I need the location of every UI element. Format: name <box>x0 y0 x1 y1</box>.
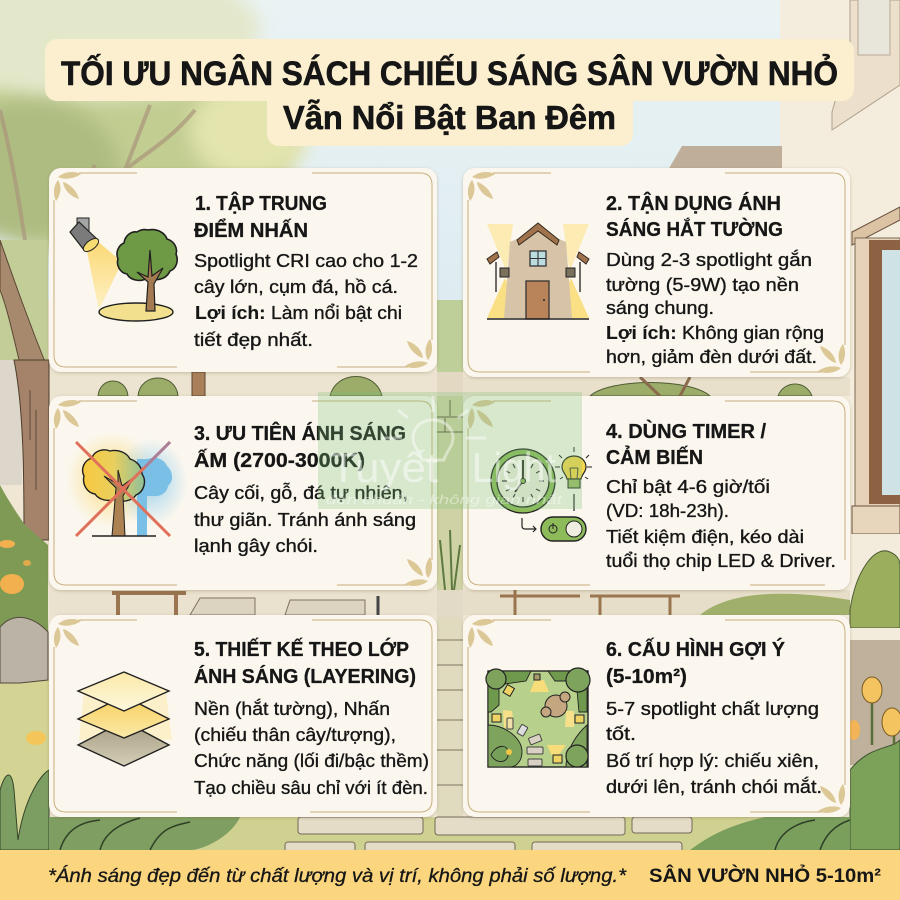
heading 6: (5-10m²) <box>606 665 687 688</box>
heading 5: ÁNH SÁNG (LAYERING) <box>194 665 416 688</box>
text 1: Spotlight CRI cao cho 1-2 <box>194 251 418 271</box>
panel 6: suggested configuration <box>463 615 850 817</box>
text 4: (VD: 18h-23h). <box>606 501 729 521</box>
panel 3: warm light <box>49 396 437 590</box>
icon: spotlight on tree <box>70 218 177 321</box>
heading 4 <box>606 419 766 469</box>
text 5: (chiếu thân cây/tượng), <box>194 725 396 745</box>
text 5 <box>194 698 429 798</box>
branch lines in foliage <box>0 105 195 290</box>
heading 4: 4. DÙNG TIMER / <box>606 419 766 443</box>
panel 1: focus on accent points <box>49 168 437 372</box>
centre channel greens <box>437 300 463 817</box>
icon: stacked light layers <box>78 672 172 766</box>
left hedge with flowers and rock <box>0 485 49 850</box>
panel 2: wall wash light <box>463 168 850 377</box>
heading 3 <box>194 421 406 472</box>
heading 3: ẤM (2700-3000K) <box>194 449 365 472</box>
building wall right <box>668 0 900 640</box>
panel 5: layering <box>49 615 437 817</box>
right hedge and tulips <box>848 534 900 850</box>
text 6: Bố trí hợp lý: chiếu xiên, <box>606 751 819 771</box>
heading 1 <box>194 191 327 242</box>
strip between rows one and two <box>49 372 850 396</box>
lawn, stepping stones and bottom plants <box>49 817 850 854</box>
text 3: lạnh gây chói. <box>194 536 318 556</box>
icon: house with wall lights <box>487 223 589 319</box>
text 1 <box>194 251 418 350</box>
text 5: Tạo chiều sâu chỉ với ít đèn. <box>194 778 428 798</box>
watermark: Tuyết <box>330 444 438 491</box>
watermark: đèn chuẩn - không gian nhất <box>326 492 564 507</box>
tree foliage top-left <box>0 0 310 260</box>
footer quote: *Ánh sáng đẹp đến từ chất lượng và vị trí, không phải số lượng.* <box>48 866 627 887</box>
title banner <box>45 39 854 146</box>
watermark: Light <box>472 444 556 491</box>
footer label: SÂN VƯỜN NHỎ 5-10m² <box>649 865 881 887</box>
text 6: tốt. <box>606 724 636 744</box>
title line 2: Vẫn Nổi Bật Ban Đêm <box>283 99 616 136</box>
text 5: Chức năng (lối đi/bậc thềm) <box>194 751 429 771</box>
text 2: hơn, giảm đèn dưới đất. <box>606 347 817 367</box>
heading 2: 2. TẬN DỤNG ÁNH <box>606 191 781 215</box>
heading 1: 1. TẬP TRUNG <box>195 191 327 215</box>
strip between rows two and three <box>49 590 850 615</box>
title line 1: TỐI ƯU NGÂN SÁCH CHIẾU SÁNG SÂN VƯỜN NHỎ <box>61 54 838 93</box>
text 2 <box>606 249 824 367</box>
heading 4: CẢM BIẾN <box>606 446 703 469</box>
heading 1: ĐIỂM NHẤN <box>194 219 308 242</box>
text 2: Lợi ích: Không gian rộng <box>606 323 824 343</box>
icon: warm versus cold tree crossed <box>66 432 188 536</box>
heading 2: SÁNG HẮT TƯỜNG <box>606 217 783 241</box>
tree trunk left <box>0 240 49 540</box>
icon: clock, bulb and switch <box>491 447 592 541</box>
text 1: cây lớn, cụm đá, hồ cá. <box>194 277 398 297</box>
text 3: Cây cối, gỗ, đá tự nhiên, <box>194 482 408 503</box>
panel 4: timer and sensor <box>463 396 850 590</box>
icon: garden plan <box>486 668 590 767</box>
heading 3: 3. ƯU TIÊN ÁNH SÁNG <box>194 421 406 445</box>
heading 5: 5. THIẾT KẾ THEO LỚP <box>194 637 409 661</box>
watermark <box>318 392 582 509</box>
heading 2 <box>606 191 783 241</box>
text 2: tường (5-9W) tạo nền <box>606 275 799 295</box>
text 4: Tiết kiệm điện, kéo dài <box>606 527 804 547</box>
heading 6: 6. CẤU HÌNH GỢI Ý <box>606 637 785 661</box>
text 6 <box>606 699 822 797</box>
text 1: Lợi ích: Làm nổi bật chi <box>195 303 402 323</box>
text 4: Chỉ bật 4-6 giờ/tối <box>606 477 770 497</box>
text 2: Dùng 2-3 spotlight gắn <box>606 249 812 270</box>
text 6: 5-7 spotlight chất lượng <box>606 699 819 719</box>
text 3: thư giãn. Tránh ánh sáng <box>194 510 416 530</box>
text 1: tiết đẹp nhất. <box>194 330 313 350</box>
text 4 <box>606 477 836 571</box>
heading 5 <box>194 637 416 688</box>
footer bar <box>0 850 900 900</box>
heading 6 <box>606 637 785 688</box>
text 6: dưới lên, tránh chói mắt. <box>606 776 822 797</box>
text 3 <box>194 482 416 556</box>
text 4: tuổi thọ chip LED & Driver. <box>606 551 836 571</box>
text 5: Nền (hắt tường), Nhấn <box>194 698 390 719</box>
text 2: sáng chung. <box>606 298 714 318</box>
